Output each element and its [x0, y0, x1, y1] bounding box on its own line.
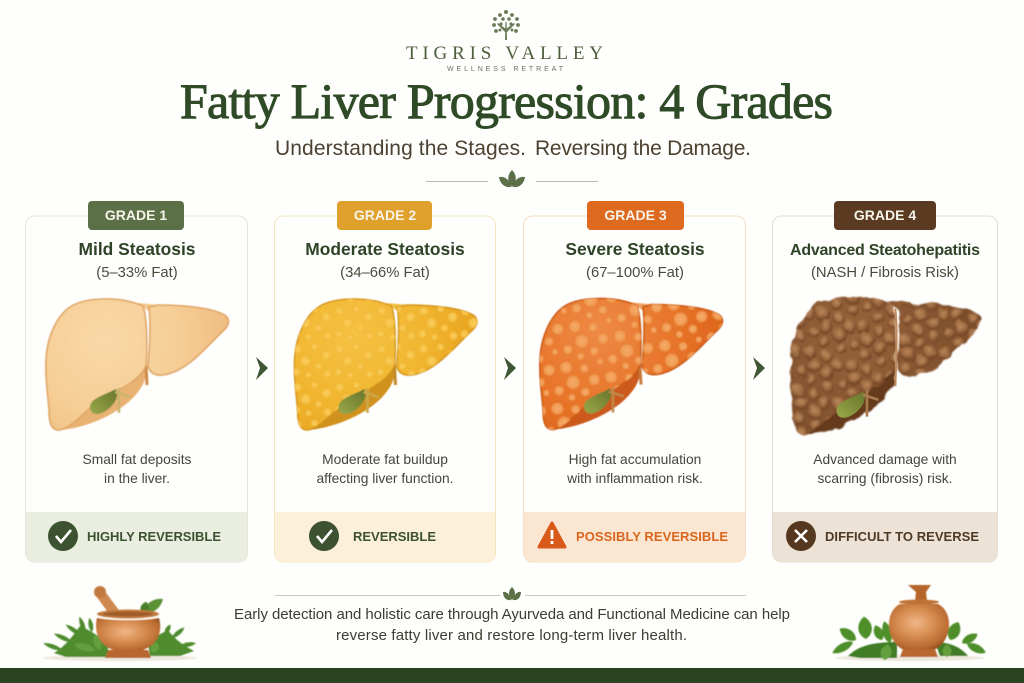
description [83, 452, 192, 486]
heading: Advanced Steatohepatitis [790, 242, 980, 259]
footer message: Early detection and holistic care through Ayurveda and Functional Medicine can help [234, 606, 790, 623]
header divider with leaf [426, 170, 598, 187]
description: Advanced damage with [813, 452, 957, 467]
arrow 3 [753, 357, 765, 380]
description [316, 452, 454, 486]
footer message [234, 606, 790, 644]
card background [772, 216, 998, 562]
fat range: (5–33% Fat) [96, 265, 178, 281]
description: Small fat deposits [83, 452, 192, 467]
liver illustration [294, 299, 477, 430]
grade badge: GRADE 3 [604, 207, 667, 223]
icon: tree [492, 10, 520, 40]
subtitle: Understanding the Stages. [275, 137, 526, 160]
fat range: (34–66% Fat) [340, 265, 430, 281]
brand tagline: WELLNESS RETREAT [447, 66, 564, 73]
fat range: (67–100% Fat) [586, 265, 684, 281]
status strip [26, 512, 247, 562]
title: Fatty Liver Progression: 4 Grades [180, 73, 833, 129]
heading: Moderate Steatosis [305, 239, 465, 259]
illustration: copper pot with leaves [830, 585, 987, 661]
panel: grade 4 [772, 201, 998, 562]
status strip [524, 512, 745, 562]
status strip [773, 512, 997, 562]
card background [524, 216, 746, 562]
footer divider with leaf [275, 587, 746, 600]
panel: grade 2 [274, 201, 496, 562]
grade badge [337, 201, 432, 230]
header logo [406, 10, 603, 73]
card background [274, 216, 496, 562]
fat range: (NASH / Fibrosis Risk) [811, 265, 959, 281]
description [813, 452, 957, 486]
description: Moderate fat buildup [322, 452, 448, 467]
liver illustration [790, 297, 982, 435]
grade badge [88, 201, 184, 230]
liver illustration [540, 298, 723, 430]
description: scarring (fibrosis) risk. [818, 471, 952, 486]
status label: DIFFICULT TO REVERSE [825, 529, 979, 544]
heading: Severe Steatosis [565, 239, 705, 259]
description: affecting liver function. [316, 471, 454, 486]
status label: HIGHLY REVERSIBLE [87, 529, 221, 544]
status strip [275, 512, 495, 562]
heading: Mild Steatosis [79, 239, 195, 259]
icon: check [48, 521, 78, 551]
subtitle [275, 137, 751, 160]
description: High fat accumulation [569, 452, 701, 467]
description: with inflammation risk. [566, 471, 703, 486]
footer band [0, 668, 1024, 683]
subtitle: Reversing the Damage. [535, 137, 751, 160]
arrow 2 [504, 357, 516, 380]
grade badge [834, 201, 936, 230]
description: in the liver. [104, 471, 170, 486]
icon: check [309, 521, 339, 551]
footer message: reverse fatty liver and restore long-term liver health. [336, 627, 687, 644]
grade badge: GRADE 4 [854, 207, 916, 223]
status label: REVERSIBLE [353, 529, 436, 544]
card background [26, 216, 248, 562]
icon: cross [786, 521, 816, 551]
illustration: mortar and pestle with herbs [42, 586, 198, 661]
arrow 1 [256, 357, 268, 380]
grade badge: GRADE 2 [354, 207, 416, 223]
panel: grade 3 [524, 201, 746, 562]
icon: warning [539, 523, 565, 547]
panel: grade 1 [26, 201, 248, 562]
status label: POSSIBLY REVERSIBLE [576, 529, 728, 544]
brand name: TIGRIS VALLEY [406, 43, 603, 64]
grade badge [587, 201, 684, 230]
liver illustration [46, 299, 229, 430]
description [566, 452, 703, 486]
grade badge: GRADE 1 [105, 207, 167, 223]
